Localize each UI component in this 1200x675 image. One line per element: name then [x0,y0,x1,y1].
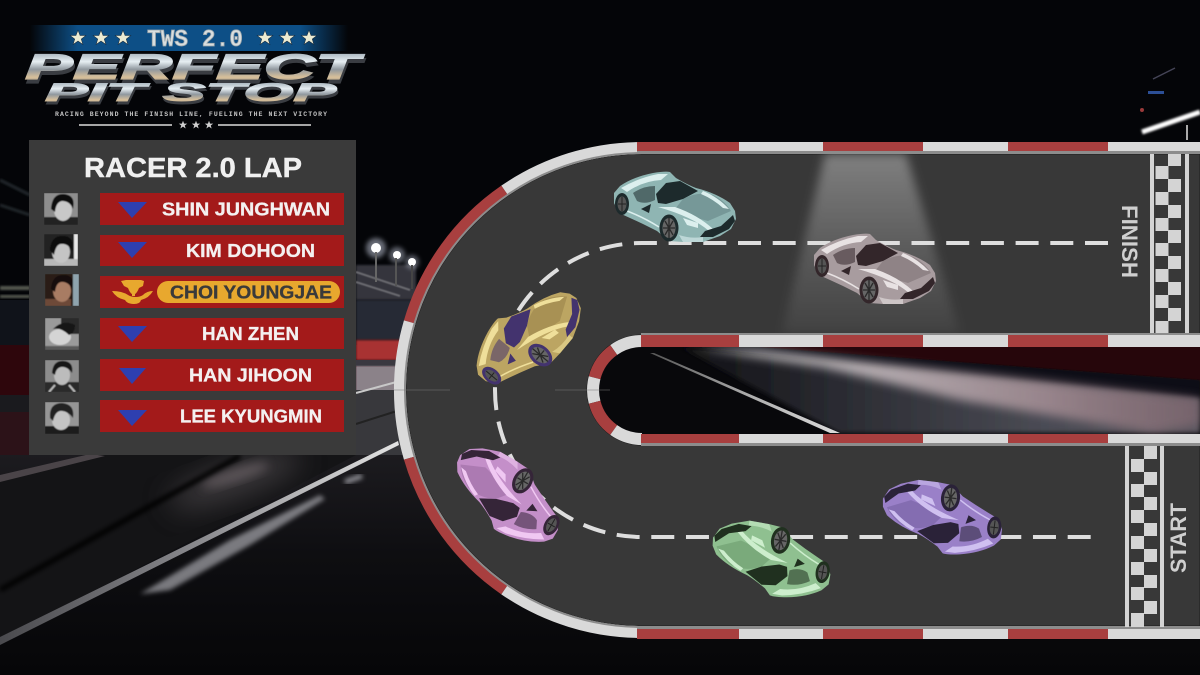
portrait [45,402,79,434]
logo subtitle: TWS 2.0 [147,27,243,54]
row: Shin Junghwan [44,193,344,225]
spotlight on leading car [782,154,960,333]
row: Kim Dohoon: KIM DOHOON [186,241,315,261]
stadium and barrier on the left [0,180,420,460]
row: Kim Dohoon [44,234,344,266]
logo title line one: PERFECT [26,52,365,91]
row: Han Jihoon: HAN JIHOON [189,366,312,386]
race track [394,142,1200,639]
logo: TWS 2.0 Perfect Pit Stop [25,25,365,128]
portrait [45,318,79,350]
dashed centre line [495,243,1108,537]
portrait [45,274,79,306]
inner kerb [593,333,1200,446]
car: silver under spotlight [814,234,936,304]
row: Han Zhen: HAN ZHEN [202,324,299,344]
car: violet [877,476,1007,561]
row: Shin Junghwan: SHIN JUNGHWAN [162,200,330,220]
finish line [1150,154,1189,333]
logo title line two: PIT STOP [46,82,338,110]
start label: START [1166,502,1191,573]
logo title line two: PIT STOP [45,79,337,107]
icon: gold trophy [112,280,153,304]
banner stars [70,30,317,44]
road surface [406,154,1200,626]
outer kerb [400,142,1200,639]
portrait [44,193,78,225]
row: Lee Kyungmin: LEE KYUNGMIN [180,406,322,426]
logo title line two [45,79,338,110]
leader name pill [157,281,340,303]
car: teal [614,172,736,242]
row: Choi Youngjae (current leader) [45,274,344,308]
asphalt with white edge line [0,441,1200,675]
panel heading: RACER 2.0 LAP [84,152,302,183]
row: Choi Youngjae (current leader): CHOI YOUNGJAE [170,282,332,302]
row: Han Zhen [45,318,344,350]
logo banner [30,25,348,51]
start line [1125,446,1164,627]
infield scene [590,335,1200,445]
logo rule and stars [79,121,311,128]
logo title line one [25,48,365,91]
logo tagline: RACING BEYOND THE FINISH LINE, FUELING THE NEXT VICTORY [55,111,327,118]
portrait [44,234,78,266]
logo title line one: PERFECT [25,48,364,87]
floodlights top right [1140,68,1200,140]
car: pink [437,435,577,557]
finish label: FINISH [1117,205,1142,278]
car: gold [462,268,594,406]
panel: racer 2.0 lap leaderboard [29,140,356,455]
portrait [45,360,79,392]
floodlights on the left [366,238,419,289]
car: green [705,515,837,605]
row: Han Jihoon [45,359,344,392]
row: Lee Kyungmin [45,400,344,434]
